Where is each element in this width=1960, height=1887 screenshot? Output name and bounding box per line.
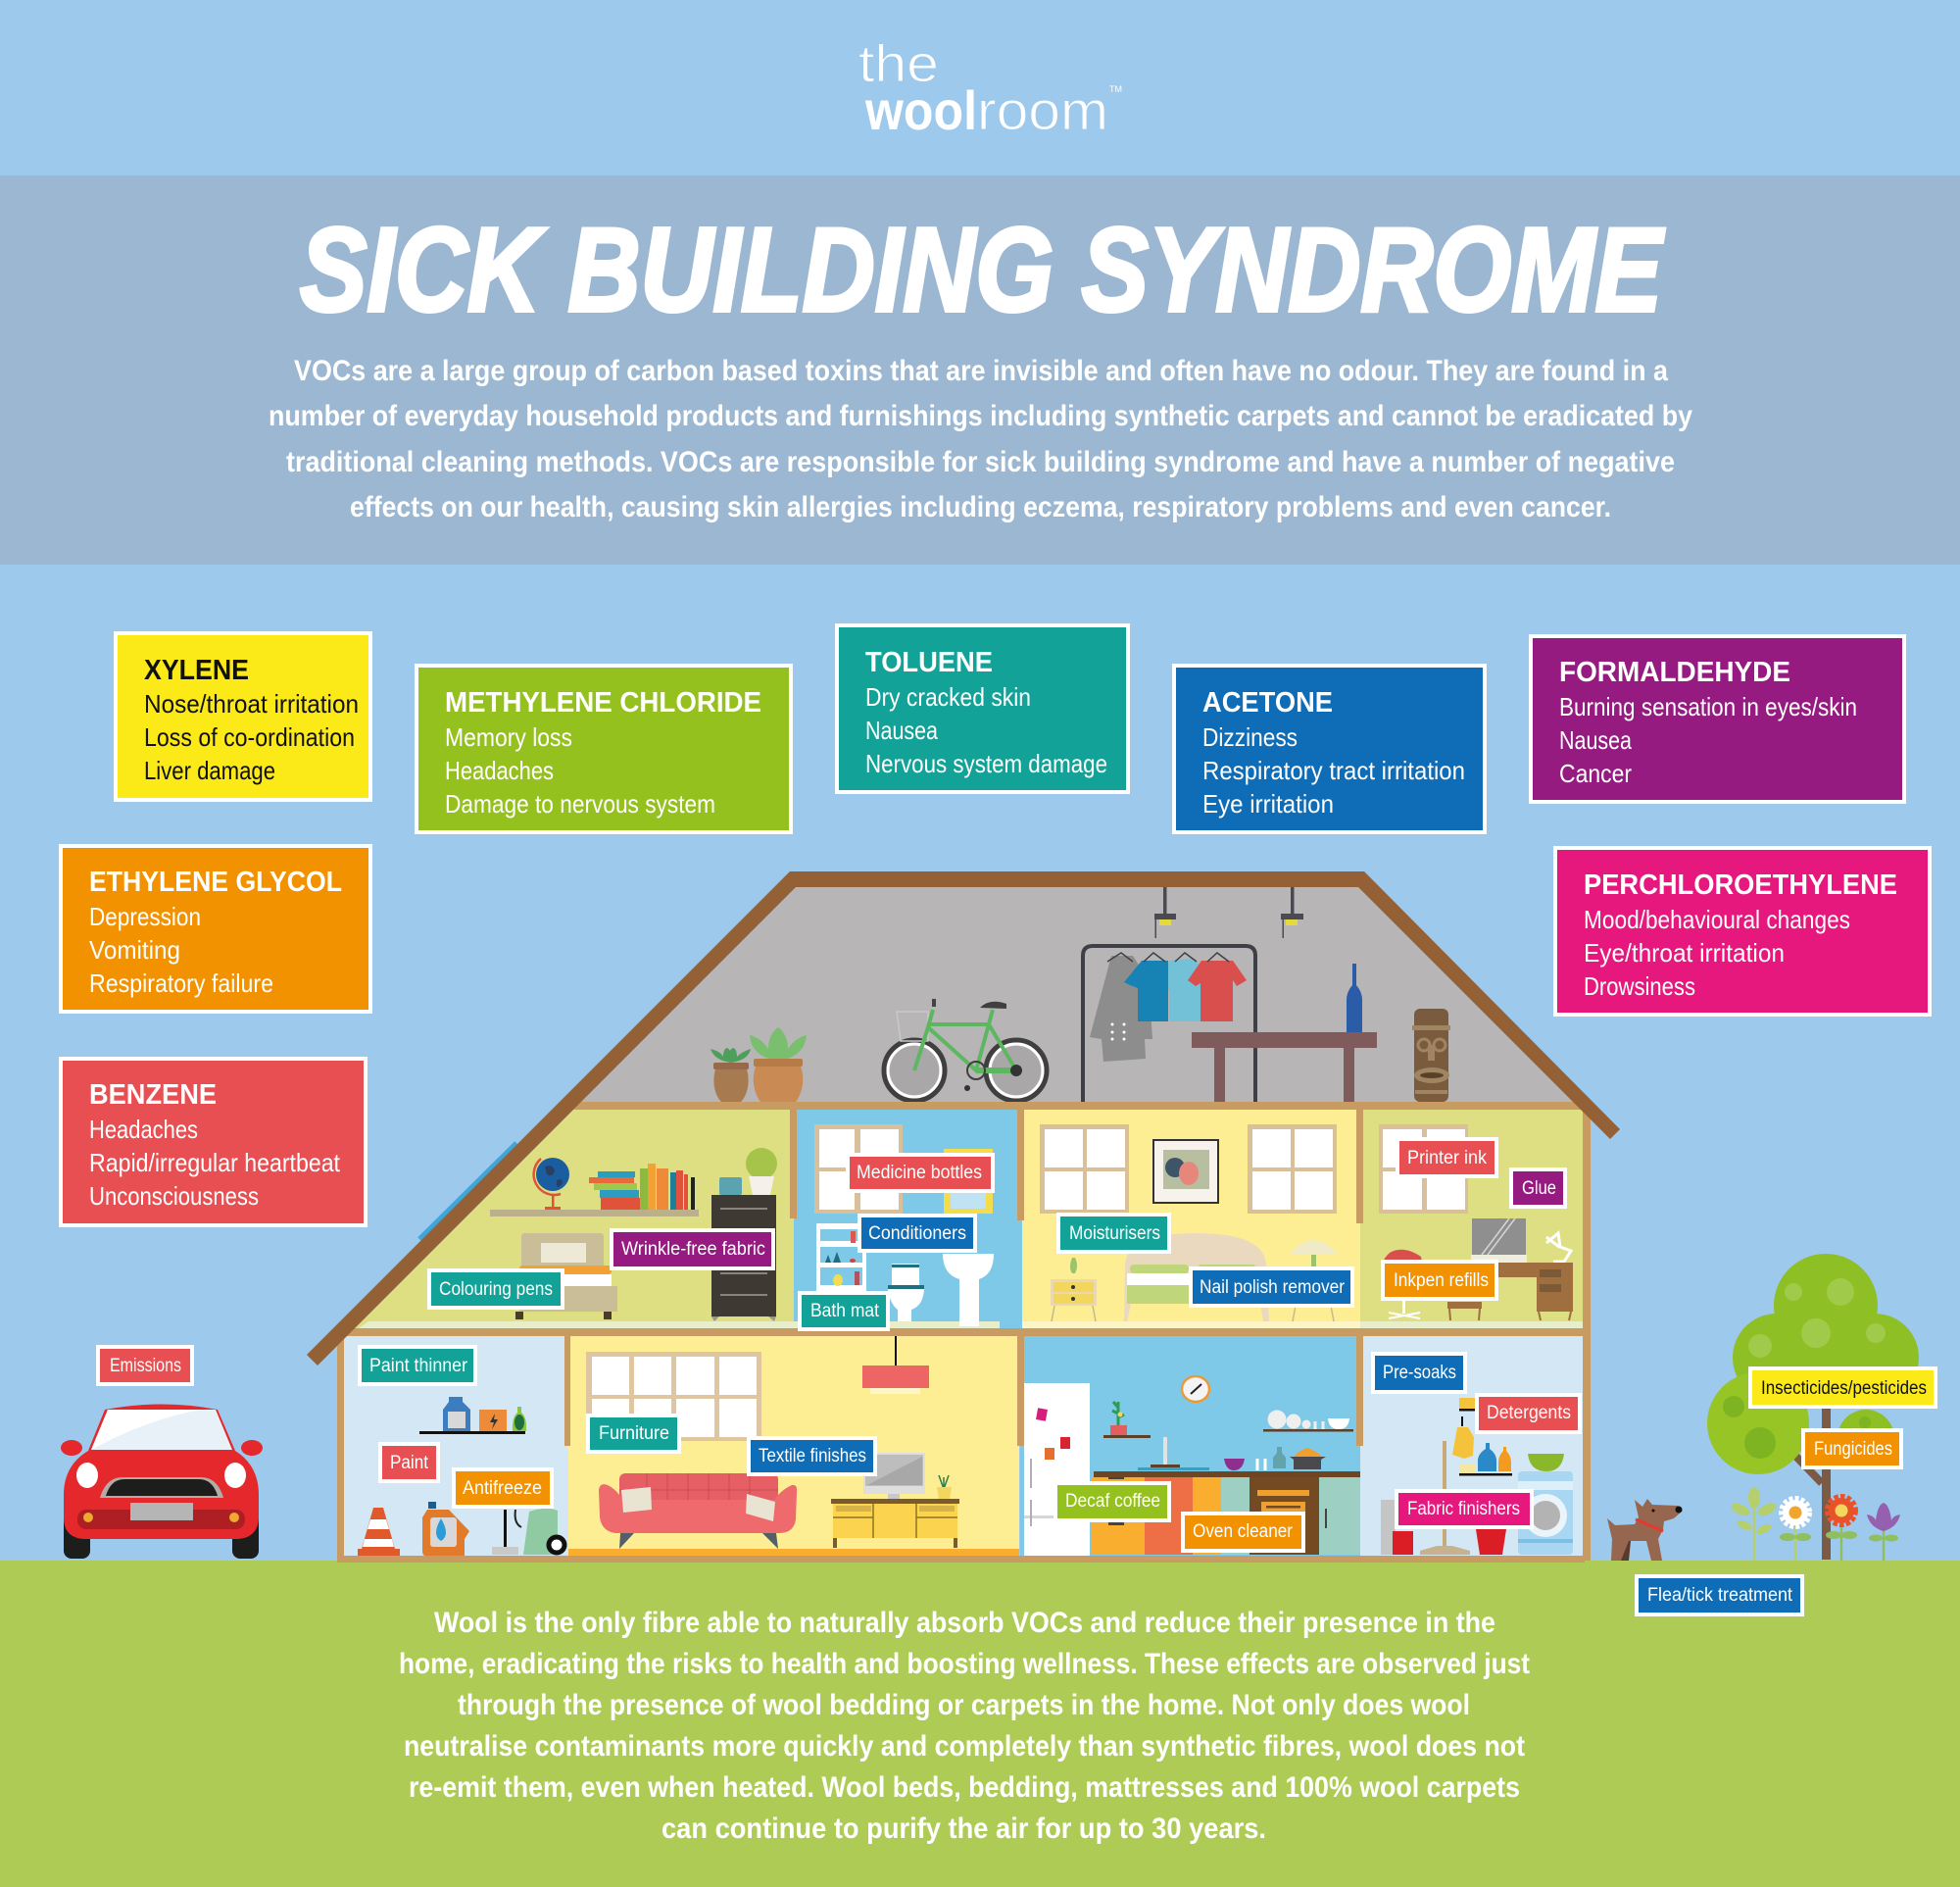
panel: perchloroethylene: Drowsiness [1584,971,1695,1001]
icon: car [61,1404,263,1559]
label: fabric finishers: Fabric finishers [1407,1499,1520,1519]
logo: wool [864,79,977,141]
intro paragraph [269,355,1692,523]
icon: mop [1420,1441,1470,1555]
icon: dresser and plant [711,1148,777,1321]
icon: table and bottle [1192,964,1377,1102]
label: printer ink [1397,1139,1496,1176]
attic [581,887,1573,1102]
room: kitchen [1020,1336,1360,1556]
panel: perchloroethylene: PERCHLOROETHYLENE [1584,869,1897,901]
panel: ethylene glycol [61,846,370,1012]
wool paragraph: Wool is the only fibre able to naturally absorb VOCs and reduce their presence in the [434,1607,1495,1639]
label: oven cleaner [1183,1514,1303,1551]
icon: clothes rack [1083,946,1255,1102]
partitions and structure [337,1102,1591,1563]
icon: shelf plant [1103,1402,1151,1438]
panel: ethylene glycol: ETHYLENE GLYCOL [89,867,342,898]
room: bedroom [1022,1110,1360,1328]
icon: bowl, glasses, bottle and pot [1224,1447,1326,1470]
icon: red bucket [1476,1529,1506,1555]
icon: clock [1182,1376,1209,1402]
panel: benzene [61,1059,366,1225]
label: paint thinner [360,1347,475,1384]
wool paragraph: through the presence of wool bedding or carpets in the home. Not only does wool [458,1689,1470,1721]
label: paint thinner: Paint thinner [369,1356,468,1376]
label: furniture [588,1415,679,1452]
label: glue: Glue [1522,1178,1556,1199]
panel: perchloroethylene: Mood/behavioural changes [1584,905,1850,934]
panel: xylene: Loss of co-ordination [144,722,355,752]
label: medicine bottles [848,1155,993,1191]
icon: mirror [944,1149,993,1214]
panel: methylene chloride: Memory loss [445,722,572,752]
room: office [1360,1110,1583,1328]
icon: sink [943,1254,994,1326]
icon: faucet and sink [1138,1437,1209,1470]
intro paragraph: effects on our health, causing skin allergies including eczema, respiratory problems and even cancer. [350,491,1611,523]
icon: monitor [1471,1218,1527,1263]
room: study [355,1110,796,1328]
label: printer ink: Printer ink [1407,1148,1487,1168]
label: pre-soaks [1373,1354,1465,1392]
label: conditioners [859,1216,975,1251]
icon: double bed [1124,1233,1269,1321]
label: furniture: Furniture [599,1423,669,1444]
panel: benzene: Rapid/irregular heartbeat [89,1148,341,1177]
label: inkpen refills [1383,1262,1496,1299]
panel: formaldehyde: FORMALDEHYDE [1559,657,1790,688]
counter [1094,1471,1360,1477]
icon: shelves and products [1452,1396,1512,1476]
panel: acetone: ACETONE [1202,687,1333,719]
icon: bathroom shelf [816,1223,866,1291]
panel: benzene: Unconsciousness [89,1181,259,1211]
intro paragraph: VOCs are a large group of carbon based toxins that are invisible and often have no odour. They are found in a [294,355,1668,387]
wool paragraph: home, eradicating the risks to health and boosting wellness. These effects are observed just [399,1648,1530,1680]
icon: fridge [1024,1383,1090,1556]
panel: acetone: Eye irritation [1202,789,1334,819]
icon: flowers [1730,1487,1900,1561]
panel: benzene: Headaches [89,1115,198,1144]
label: nail polish remover [1191,1268,1352,1306]
title band [0,175,1960,565]
panel: toluene: TOLUENE [865,647,993,678]
icon: globe [534,1158,569,1210]
panel: methylene chloride: Headaches [445,756,554,785]
icon: ceiling lamps [1154,887,1303,938]
panel: formaldehyde: Nausea [1559,725,1632,755]
shelf [490,1210,699,1217]
panel: xylene: Liver damage [144,756,275,785]
logo [858,35,1122,141]
label: wrinkle-free fabric: Wrinkle-free fabric [621,1239,765,1260]
icon: traffic cone [358,1508,400,1556]
panel: ethylene glycol: Respiratory failure [89,968,273,998]
label: textile finishes: Textile finishes [759,1446,866,1466]
panel: benzene: BENZENE [89,1079,217,1111]
icon: desk [1447,1263,1573,1320]
icon: sofa [599,1473,797,1549]
roof [307,871,1620,1366]
icon: large plant [750,1027,807,1102]
room: bathroom [794,1110,1024,1328]
label: colouring pens: Colouring pens [439,1279,553,1300]
label: decaf coffee: Decaf coffee [1065,1491,1160,1512]
panel: xylene [116,633,370,800]
icon: bedside lamp [1291,1240,1337,1321]
label: fungicides [1803,1430,1901,1467]
icon: washing machine [1518,1454,1573,1555]
label: bath mat: Bath mat [810,1301,880,1321]
label: textile finishes [749,1438,875,1474]
panel: perchloroethylene [1555,848,1930,1015]
ground [0,1561,1960,1887]
label: wrinkle-free fabric [612,1230,773,1268]
room: garage [344,1336,569,1556]
label: medicine bottles: Medicine bottles [857,1163,982,1183]
panel: xylene: Nose/throat irritation [144,689,359,719]
icon: shelf items [419,1397,526,1434]
label: fungicides: Fungicides [1814,1439,1892,1460]
label: emissions [98,1347,192,1384]
icon: bicycle [884,999,1047,1101]
icon: nightstand [1051,1258,1097,1321]
label: glue [1511,1169,1565,1207]
panel: acetone [1174,666,1485,832]
label: colouring pens [429,1270,563,1308]
panel: methylene chloride: Damage to nervous system [445,789,715,819]
label: fabric finishers [1396,1491,1532,1527]
label: inkpen refills: Inkpen refills [1394,1270,1489,1291]
icon: window [586,1352,761,1441]
label: bath mat [800,1293,888,1329]
panel: formaldehyde: Burning sensation in eyes/skin [1559,692,1857,721]
label: antifreeze [454,1469,552,1507]
label: detergents: Detergents [1487,1403,1571,1423]
panel: ethylene glycol: Depression [89,902,201,931]
label: detergents [1477,1395,1580,1432]
label: insecticides/pesticides: Insecticides/pesticides [1761,1378,1927,1399]
icon: tiki statue [1412,1009,1450,1102]
title: SICK BUILDING SYNDROME [300,203,1665,336]
icon: dishes [1263,1410,1353,1431]
panel: acetone: Dizziness [1202,722,1298,752]
wool paragraph: re-emit them, even when heated. Wool beds, bedding, mattresses and 100% wool carpets [409,1771,1520,1804]
icon: desk lamp [1546,1233,1571,1262]
label: flea/tick treatment: Flea/tick treatment [1647,1585,1793,1606]
panel: formaldehyde [1531,636,1904,802]
wool paragraph [399,1607,1530,1845]
panel: toluene [837,625,1128,792]
icon: solar panel [419,1143,516,1239]
panel: methylene chloride [416,666,791,832]
label: moisturisers: Moisturisers [1069,1223,1160,1244]
label: nail polish remover: Nail polish remover [1200,1277,1346,1298]
panel: formaldehyde: Cancer [1559,759,1632,788]
label: conditioners: Conditioners [868,1223,966,1244]
label: moisturisers [1058,1215,1169,1252]
label: emissions: Emissions [110,1356,181,1376]
label: pre-soaks: Pre-soaks [1383,1363,1456,1383]
panel: methylene chloride: METHYLENE CHLORIDE [445,687,761,719]
intro paragraph: traditional cleaning methods. VOCs are responsible for sick building syndrome and have a number of negative [286,446,1675,478]
icon: chair [1381,1250,1427,1318]
house [307,871,1620,1563]
logo: room [977,79,1108,141]
icon: sideboard and tv [831,1454,959,1548]
icon: small plant [710,1048,751,1102]
icon: toilet [888,1264,924,1321]
room: laundry [1360,1336,1583,1556]
panel: toluene: Nervous system damage [865,749,1107,778]
icon: picture [1153,1140,1218,1203]
label: paint: Paint [390,1453,429,1473]
icon: dog [1607,1499,1683,1561]
icon: windows [1040,1124,1337,1214]
icon: books [589,1164,695,1210]
wool paragraph: can continue to purify the air for up to 30 years. [662,1813,1266,1845]
icon: pendant lamp [862,1336,929,1394]
panel: toluene: Nausea [865,716,938,745]
icon: antifreeze jug [422,1502,469,1556]
label: oven cleaner: Oven cleaner [1193,1521,1294,1542]
icon: window [814,1124,903,1214]
icon: bin and dustpan [1381,1500,1413,1555]
room: living room [568,1336,1019,1556]
panel: acetone: Respiratory tract irritation [1202,756,1465,785]
icon: vacuum cleaner [492,1509,564,1555]
logo: the [858,35,939,93]
icon: cabinets and oven [1092,1477,1360,1555]
icon: bed [515,1233,617,1319]
panel: ethylene glycol: Vomiting [89,935,180,965]
label: paint [380,1444,438,1481]
label: flea/tick treatment [1637,1576,1802,1614]
label: antifreeze: Antifreeze [463,1478,542,1499]
intro paragraph: number of everyday household products and furnishings including synthetic carpets and cannot be eradicated by [269,400,1692,432]
panel: xylene: XYLENE [144,655,249,686]
label: insecticides/pesticides [1750,1368,1936,1407]
icon: tree [1707,1254,1919,1560]
panel: toluene: Dry cracked skin [865,682,1031,712]
label: decaf coffee [1055,1483,1169,1520]
icon: window [1379,1124,1468,1214]
panel: perchloroethylene: Eye/throat irritation [1584,938,1785,968]
wool paragraph: neutralise contaminants more quickly and completely than synthetic fibres, wool does not [404,1730,1525,1763]
logo: TM [1109,84,1122,94]
